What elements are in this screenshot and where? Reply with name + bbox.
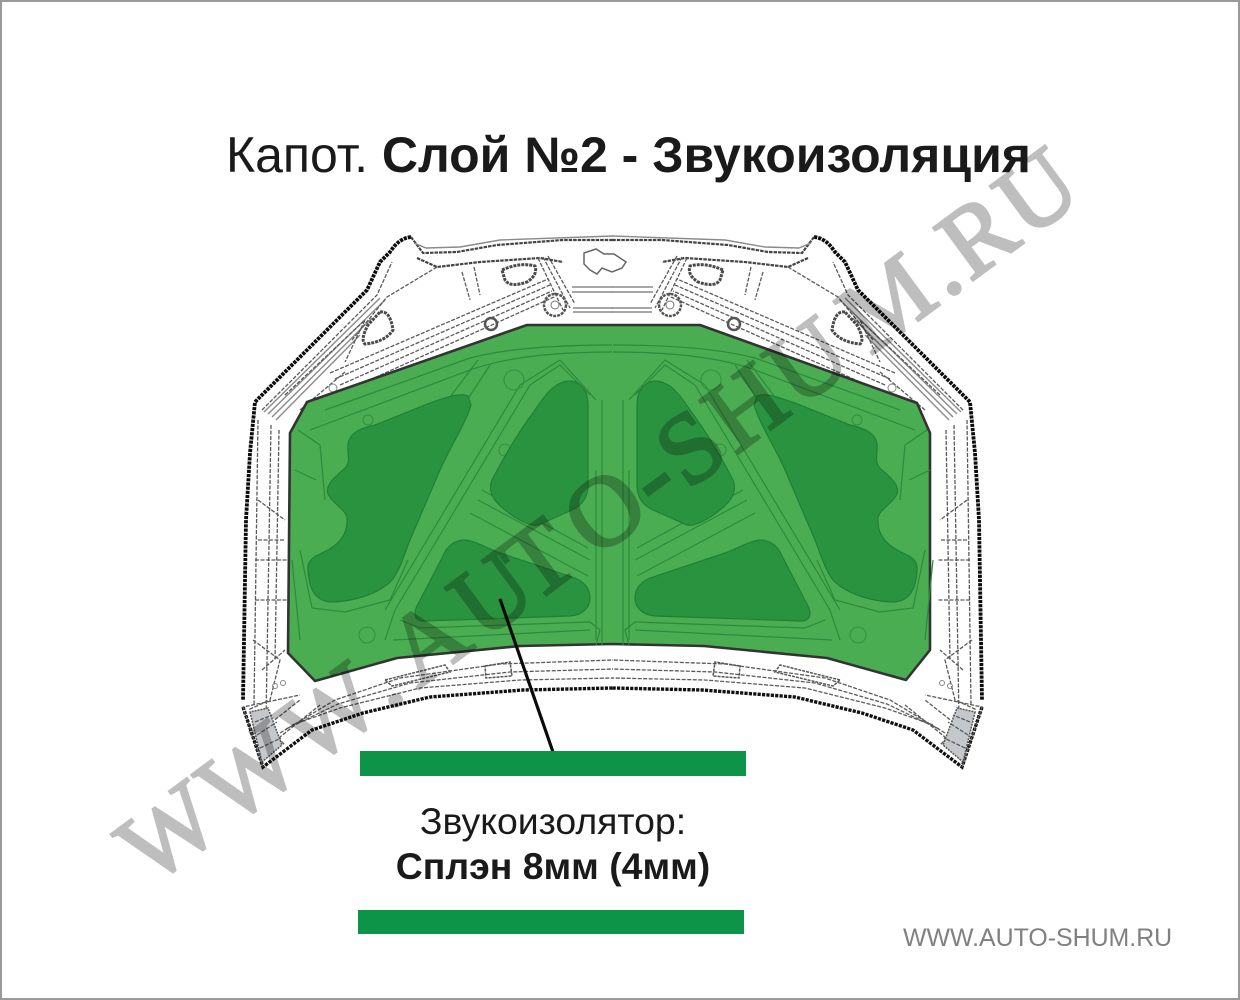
footer url: WWW.AUTO-SHUM.RU	[903, 924, 1172, 952]
centre top cut-out shape	[584, 249, 626, 274]
left half of line art	[243, 236, 613, 767]
material label line 1: Звукоизолятор:	[420, 800, 686, 842]
hood line drawing	[243, 236, 982, 767]
green panel details right	[613, 345, 933, 645]
right half of line art	[612, 236, 982, 767]
bottom green bar	[358, 910, 744, 934]
green sound insulation panel	[288, 325, 930, 681]
green panel details left	[292, 345, 612, 645]
watermark: WWW.AUTO-SHUM.RU	[97, 126, 1099, 905]
top green bar	[360, 751, 746, 776]
material label line 2: Сплэн 8мм (4мм)	[396, 845, 710, 887]
leader line	[500, 599, 553, 752]
title: Капот. Слой №2 - Звукоизоляция	[226, 127, 1031, 183]
material label	[396, 800, 710, 887]
